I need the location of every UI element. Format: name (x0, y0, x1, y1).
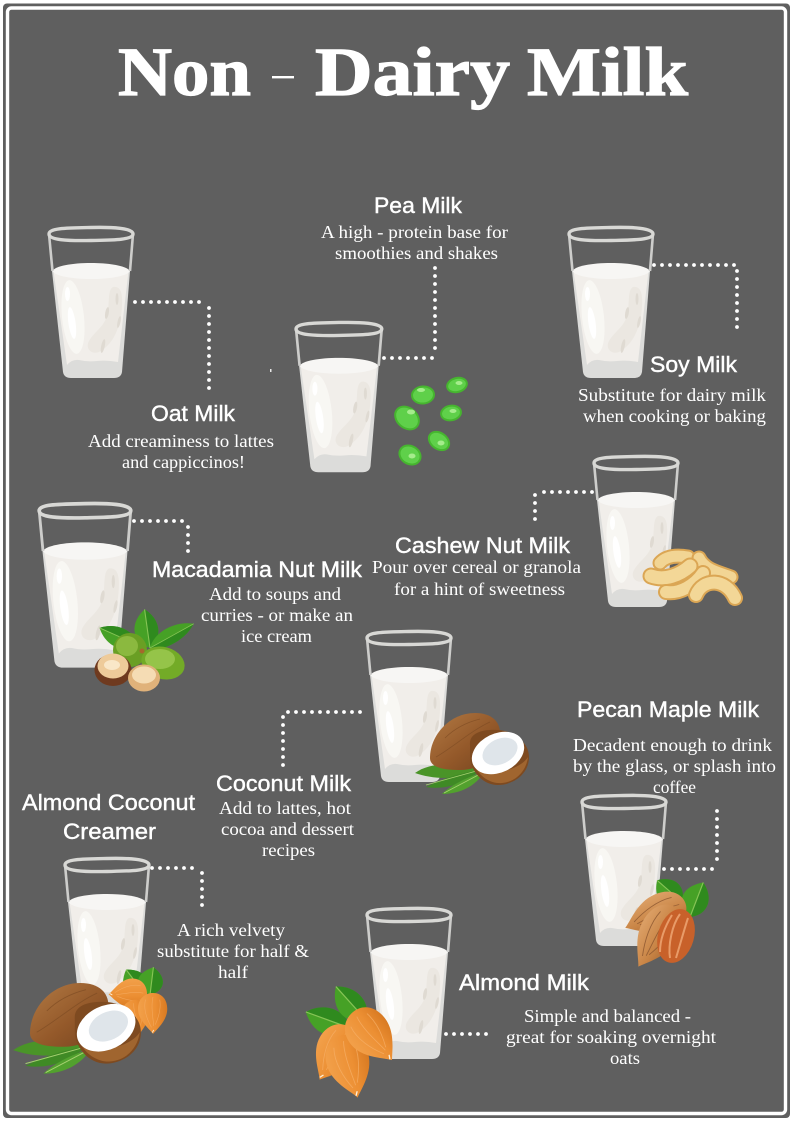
icon: coconut milk glass (367, 631, 451, 782)
title: Milk (527, 34, 689, 110)
panel: almond coconut creamer (13, 790, 309, 1074)
icon: almond milk glass (367, 908, 451, 1059)
icon: almonds (108, 963, 167, 1036)
panel: cashew nut milk (372, 456, 735, 607)
text: cashew milk description (372, 557, 581, 599)
icon: coconut (415, 713, 531, 794)
text: cashew milk description: Pour over cereal or granola (372, 557, 581, 577)
panel: oat milk (49, 227, 274, 472)
icon: pecan milk glass (582, 795, 666, 946)
panel: almond milk (301, 908, 716, 1103)
text: coconut milk description (219, 798, 354, 860)
icon: cashew milk glass (594, 456, 678, 607)
heading: soy milk: Soy Milk (650, 352, 738, 377)
heading: oat milk: Oat Milk (151, 401, 236, 426)
heading: macadamia nut milk: Macadamia Nut Milk (152, 557, 363, 582)
panel: soy milk (569, 227, 766, 426)
icon: creamer glass (65, 858, 149, 1009)
text: coconut milk description: Add to lattes, hot (219, 798, 351, 818)
panel: macadamia nut milk (39, 504, 363, 692)
heading: pecan maple milk: Pecan Maple Milk (577, 697, 760, 722)
heading: cashew nut milk: Cashew Nut Milk (395, 533, 571, 558)
panel: coconut milk (216, 631, 531, 860)
text: pecan maple milk description: Decadent enough to drink (573, 735, 772, 755)
connector: oat milk (135, 302, 209, 390)
text: almond milk description: great for soaking overnight (506, 1027, 716, 1047)
text: macadamia milk description: ice cream (241, 626, 312, 646)
text: pecan maple milk description (573, 735, 776, 797)
text: coconut milk description: cocoa and dessert (221, 819, 354, 839)
text: almond milk description: Simple and balanced - (524, 1006, 691, 1026)
text: almond milk description (506, 1006, 716, 1068)
icon: soy milk glass (569, 227, 653, 378)
connector: coconut milk (283, 712, 360, 766)
heading: almond coconut creamer (22, 790, 195, 844)
heading: pea milk: Pea Milk (374, 193, 463, 218)
connector: creamer (152, 868, 202, 911)
heading: coconut milk: Coconut Milk (216, 771, 352, 796)
decorative speck (270, 369, 272, 372)
icon: cashews (651, 556, 735, 598)
text: pea milk description (321, 222, 508, 263)
text: pecan maple milk description: coffee (653, 777, 696, 797)
text: oat milk description (88, 431, 274, 472)
icon: pea milk glass (296, 322, 382, 472)
text: oat milk description: and cappiccinos! (122, 452, 245, 472)
text: soy milk description (578, 385, 766, 426)
text: macadamia milk description: curries - or make an (201, 605, 353, 625)
text: creamer description: A rich velvety (177, 920, 285, 940)
text: creamer description: substitute for half & (157, 941, 309, 961)
text: soy milk description: when cooking or baking (583, 406, 766, 426)
connector: almond milk (446, 1032, 492, 1036)
text: almond milk description: oats (610, 1048, 640, 1068)
text: oat milk description: Add creaminess to lattes (88, 431, 274, 451)
title: Dairy (315, 34, 510, 110)
title (118, 34, 689, 110)
icon: almonds (301, 979, 408, 1103)
icon: oat milk glass (49, 227, 133, 378)
connector: pea milk (384, 268, 435, 358)
heading: almond coconut creamer: Almond Coconut (22, 790, 195, 815)
connector: soy milk (654, 265, 737, 335)
text: pecan maple milk description: by the glass, or splash into (573, 756, 776, 776)
icon: macadamia nuts (94, 608, 197, 692)
text: macadamia milk description: Add to soups and (209, 584, 341, 604)
icon: coconut (13, 983, 143, 1074)
heading: almond milk: Almond Milk (459, 970, 590, 995)
title: Non (118, 34, 251, 110)
text: soy milk description: Substitute for dairy milk (578, 385, 766, 405)
text: cashew milk description: for a hint of sweetness (394, 579, 565, 599)
panel: pea milk (296, 193, 508, 472)
icon: green peas (391, 376, 468, 468)
text: pea milk description: smoothies and shakes (335, 243, 498, 263)
text: coconut milk description: recipes (262, 840, 315, 860)
connector: cashew milk (535, 492, 592, 526)
icon: pecans (618, 872, 714, 977)
heading: almond coconut creamer: Creamer (63, 819, 156, 844)
text: pea milk description: A high - protein base for (321, 222, 508, 242)
text: creamer description: half (218, 962, 248, 982)
panel: pecan maple milk (573, 697, 776, 977)
icon: macadamia milk glass (39, 504, 131, 668)
text: creamer description (157, 920, 309, 982)
connector: pecan milk (664, 811, 717, 869)
text: macadamia milk description (201, 584, 353, 646)
connector: macadamia milk (134, 521, 188, 553)
